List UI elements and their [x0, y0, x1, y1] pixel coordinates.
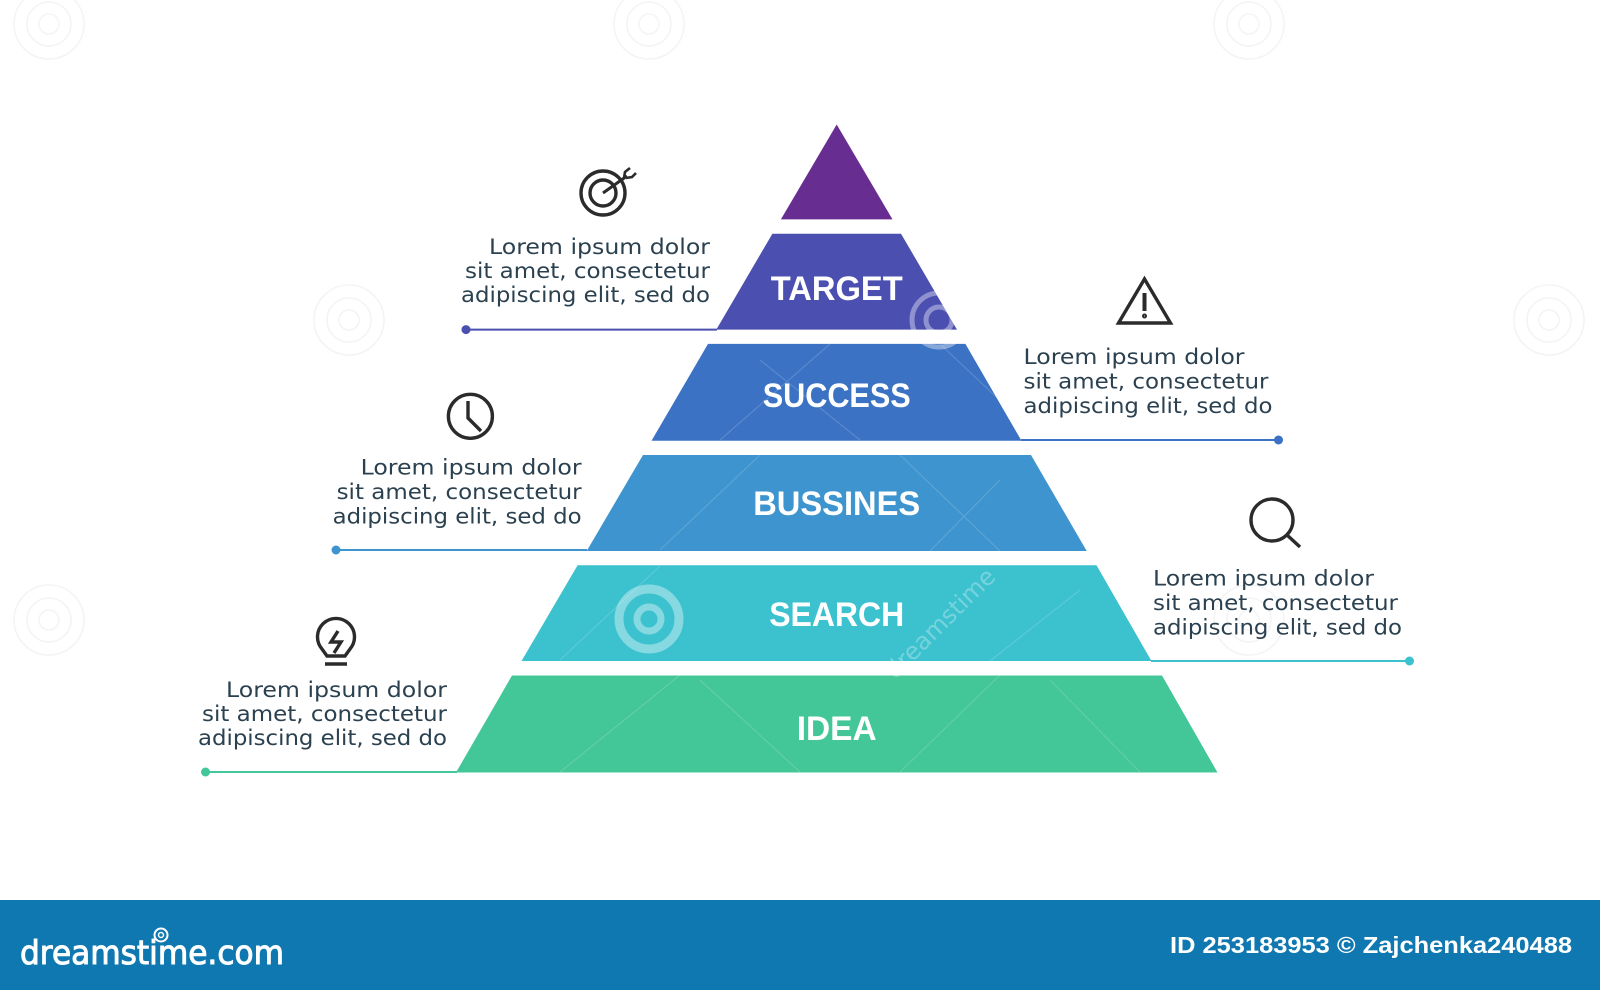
watermark: lines and spirals over pyramid: dreamstime [879, 563, 1001, 684]
watermark: faint spirals on background [14, 0, 1584, 655]
text: bussines: Lorem ipsum dolor [361, 456, 582, 480]
tier: search: SEARCH [769, 596, 904, 634]
text: idea: adipiscing elit, sed do [198, 726, 447, 750]
text: success: Lorem ipsum dolor [1024, 345, 1245, 369]
icon: warning [1118, 279, 1170, 323]
tier: target [716, 234, 957, 330]
text: search: adipiscing elit, sed do [1153, 616, 1402, 640]
text: idea [198, 678, 447, 750]
leader line: bussines [332, 546, 587, 554]
footer banner [0, 900, 1600, 990]
tier: bussines: BUSSINES [753, 485, 920, 523]
leader line: success [1021, 436, 1283, 444]
callout: target [461, 168, 717, 334]
tier: idea [456, 676, 1218, 772]
icon: target [581, 168, 636, 215]
tier: success: SUCCESS [763, 377, 911, 415]
text: idea: sit amet, consectetur [202, 702, 447, 726]
text: target: adipiscing elit, sed do [461, 283, 710, 307]
text: bussines: sit amet, consectetur [337, 480, 582, 504]
callout: success [1021, 279, 1283, 444]
tier: search [522, 565, 1152, 661]
text: success: sit amet, consectetur [1024, 370, 1269, 394]
footer logo: dreamstime.com: dreamstime.com [20, 933, 284, 972]
tier: target: TARGET [771, 270, 903, 308]
leader line: search [1151, 656, 1414, 666]
text: bussines: adipiscing elit, sed do [333, 504, 582, 528]
text: success: adipiscing elit, sed do [1024, 394, 1272, 418]
icon: magnifier [1251, 499, 1300, 547]
footer credit: ID 253183953 © Zajchenka240488 [1170, 932, 1572, 958]
text: bussines [333, 456, 582, 528]
leader line: idea [201, 768, 457, 776]
text: search [1153, 566, 1402, 640]
icon: clock [448, 394, 492, 438]
text: success [1024, 345, 1272, 418]
watermark: lines and spirals over pyramid [560, 293, 1140, 772]
leader line: target [462, 325, 717, 334]
callout: idea [198, 618, 457, 776]
text: target: sit amet, consectetur [465, 259, 710, 283]
text: target [461, 235, 710, 307]
callout: search [1151, 499, 1414, 666]
tier: idea: IDEA [797, 710, 877, 748]
text: target: Lorem ipsum dolor [489, 235, 710, 259]
callout: bussines [332, 394, 587, 554]
text: idea: Lorem ipsum dolor [226, 678, 447, 702]
text: search: sit amet, consectetur [1153, 591, 1398, 615]
pyramid [456, 124, 1218, 772]
tier: bussines [587, 455, 1087, 551]
tier: success [652, 344, 1022, 441]
icon: light bulb [318, 618, 354, 664]
tier: apex [781, 124, 892, 219]
text: search: Lorem ipsum dolor [1153, 566, 1374, 590]
